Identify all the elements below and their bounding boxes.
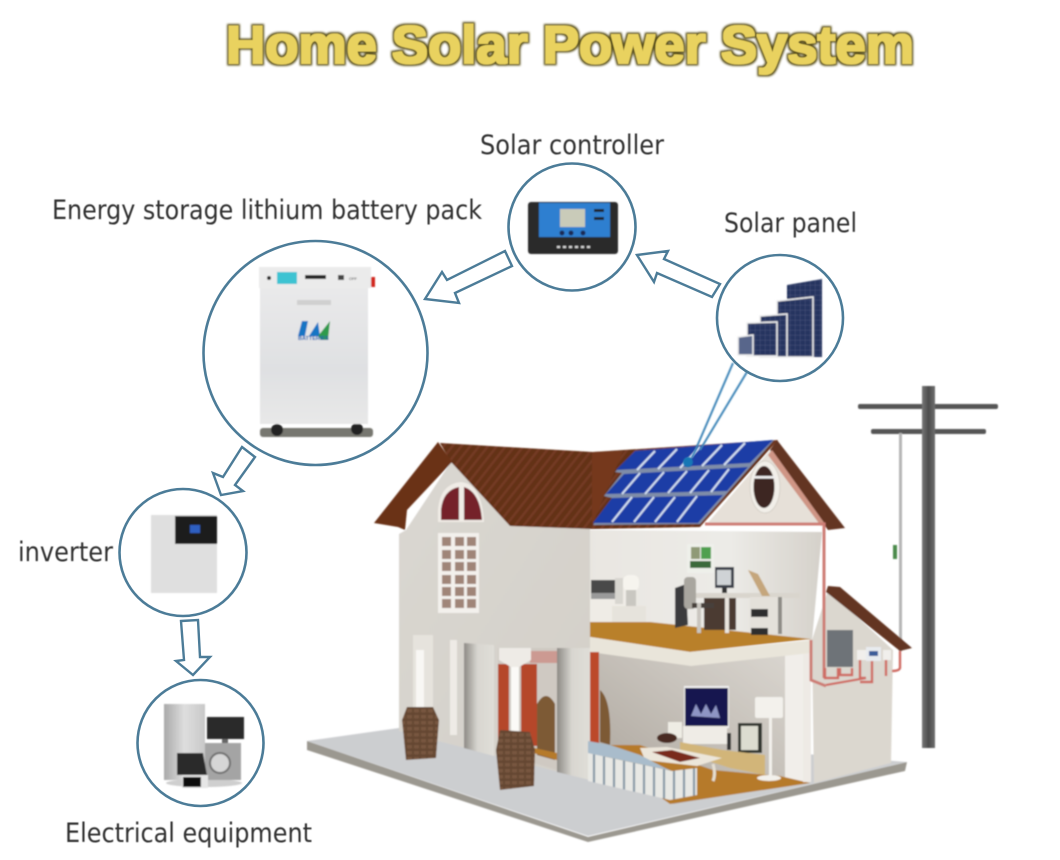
upper wood floor bbox=[590, 622, 811, 652]
brick piers bbox=[402, 707, 535, 790]
circle: solar controller bbox=[508, 164, 636, 290]
arrow: controller to battery bbox=[425, 251, 512, 303]
icon: charge controller bbox=[528, 202, 618, 254]
circle: electrical equipment bbox=[138, 680, 264, 806]
circle: inverter bbox=[120, 489, 246, 616]
icon: battery cabinet: BATTERIES bbox=[298, 336, 329, 342]
arrow: solar panel to controller bbox=[637, 251, 720, 297]
upper room bbox=[590, 530, 822, 640]
main facade walls bbox=[399, 462, 590, 780]
arrow: inverter to equipment bbox=[176, 620, 210, 675]
rooftop solar array bbox=[593, 440, 774, 525]
living room furniture bbox=[588, 686, 783, 800]
brown roof bbox=[374, 440, 845, 530]
annex roof bbox=[826, 586, 912, 651]
label: energy storage lithium battery pack: Energy storage lithium battery pack bbox=[52, 195, 483, 226]
icon: battery cabinet: OFF bbox=[349, 276, 358, 281]
corner wall column bbox=[557, 648, 590, 780]
doorway opening bbox=[464, 643, 494, 756]
circle: battery pack bbox=[204, 241, 428, 465]
meter wiring bbox=[825, 651, 900, 685]
meters bbox=[857, 647, 891, 661]
title: Home Solar Power System bbox=[226, 16, 914, 75]
upper left arch window bbox=[438, 482, 484, 522]
icon: solar panels stack bbox=[738, 279, 822, 357]
floor slab bbox=[590, 637, 812, 666]
utility pole bbox=[858, 386, 998, 748]
grid window bbox=[438, 533, 479, 613]
lower room bbox=[588, 650, 811, 804]
leader from solar panel to roof bbox=[683, 363, 747, 467]
icon: home appliances bbox=[164, 704, 244, 788]
ground slab bbox=[307, 728, 907, 842]
label: solar controller: Solar controller bbox=[480, 130, 664, 161]
electric panel box bbox=[827, 630, 853, 667]
arrow: battery to inverter bbox=[213, 447, 255, 495]
house illustration bbox=[307, 440, 912, 842]
label: inverter: inverter bbox=[18, 537, 113, 568]
circle: solar panels bbox=[717, 255, 843, 381]
round window bbox=[750, 461, 780, 513]
rear room with red walls bbox=[498, 648, 557, 770]
label: solar panel: Solar panel bbox=[724, 208, 857, 239]
lower left porch bbox=[413, 635, 457, 735]
red strip bbox=[590, 652, 599, 743]
office: shelf, desk, monitor, person bbox=[675, 544, 800, 635]
annex wall bbox=[812, 590, 893, 783]
label: electrical equipment: Electrical equipment bbox=[65, 818, 312, 849]
right gable wall bbox=[706, 448, 824, 525]
pink wiring bbox=[705, 524, 826, 686]
icon: inverter unit bbox=[151, 515, 217, 593]
icon: battery cabinet bbox=[259, 267, 375, 437]
